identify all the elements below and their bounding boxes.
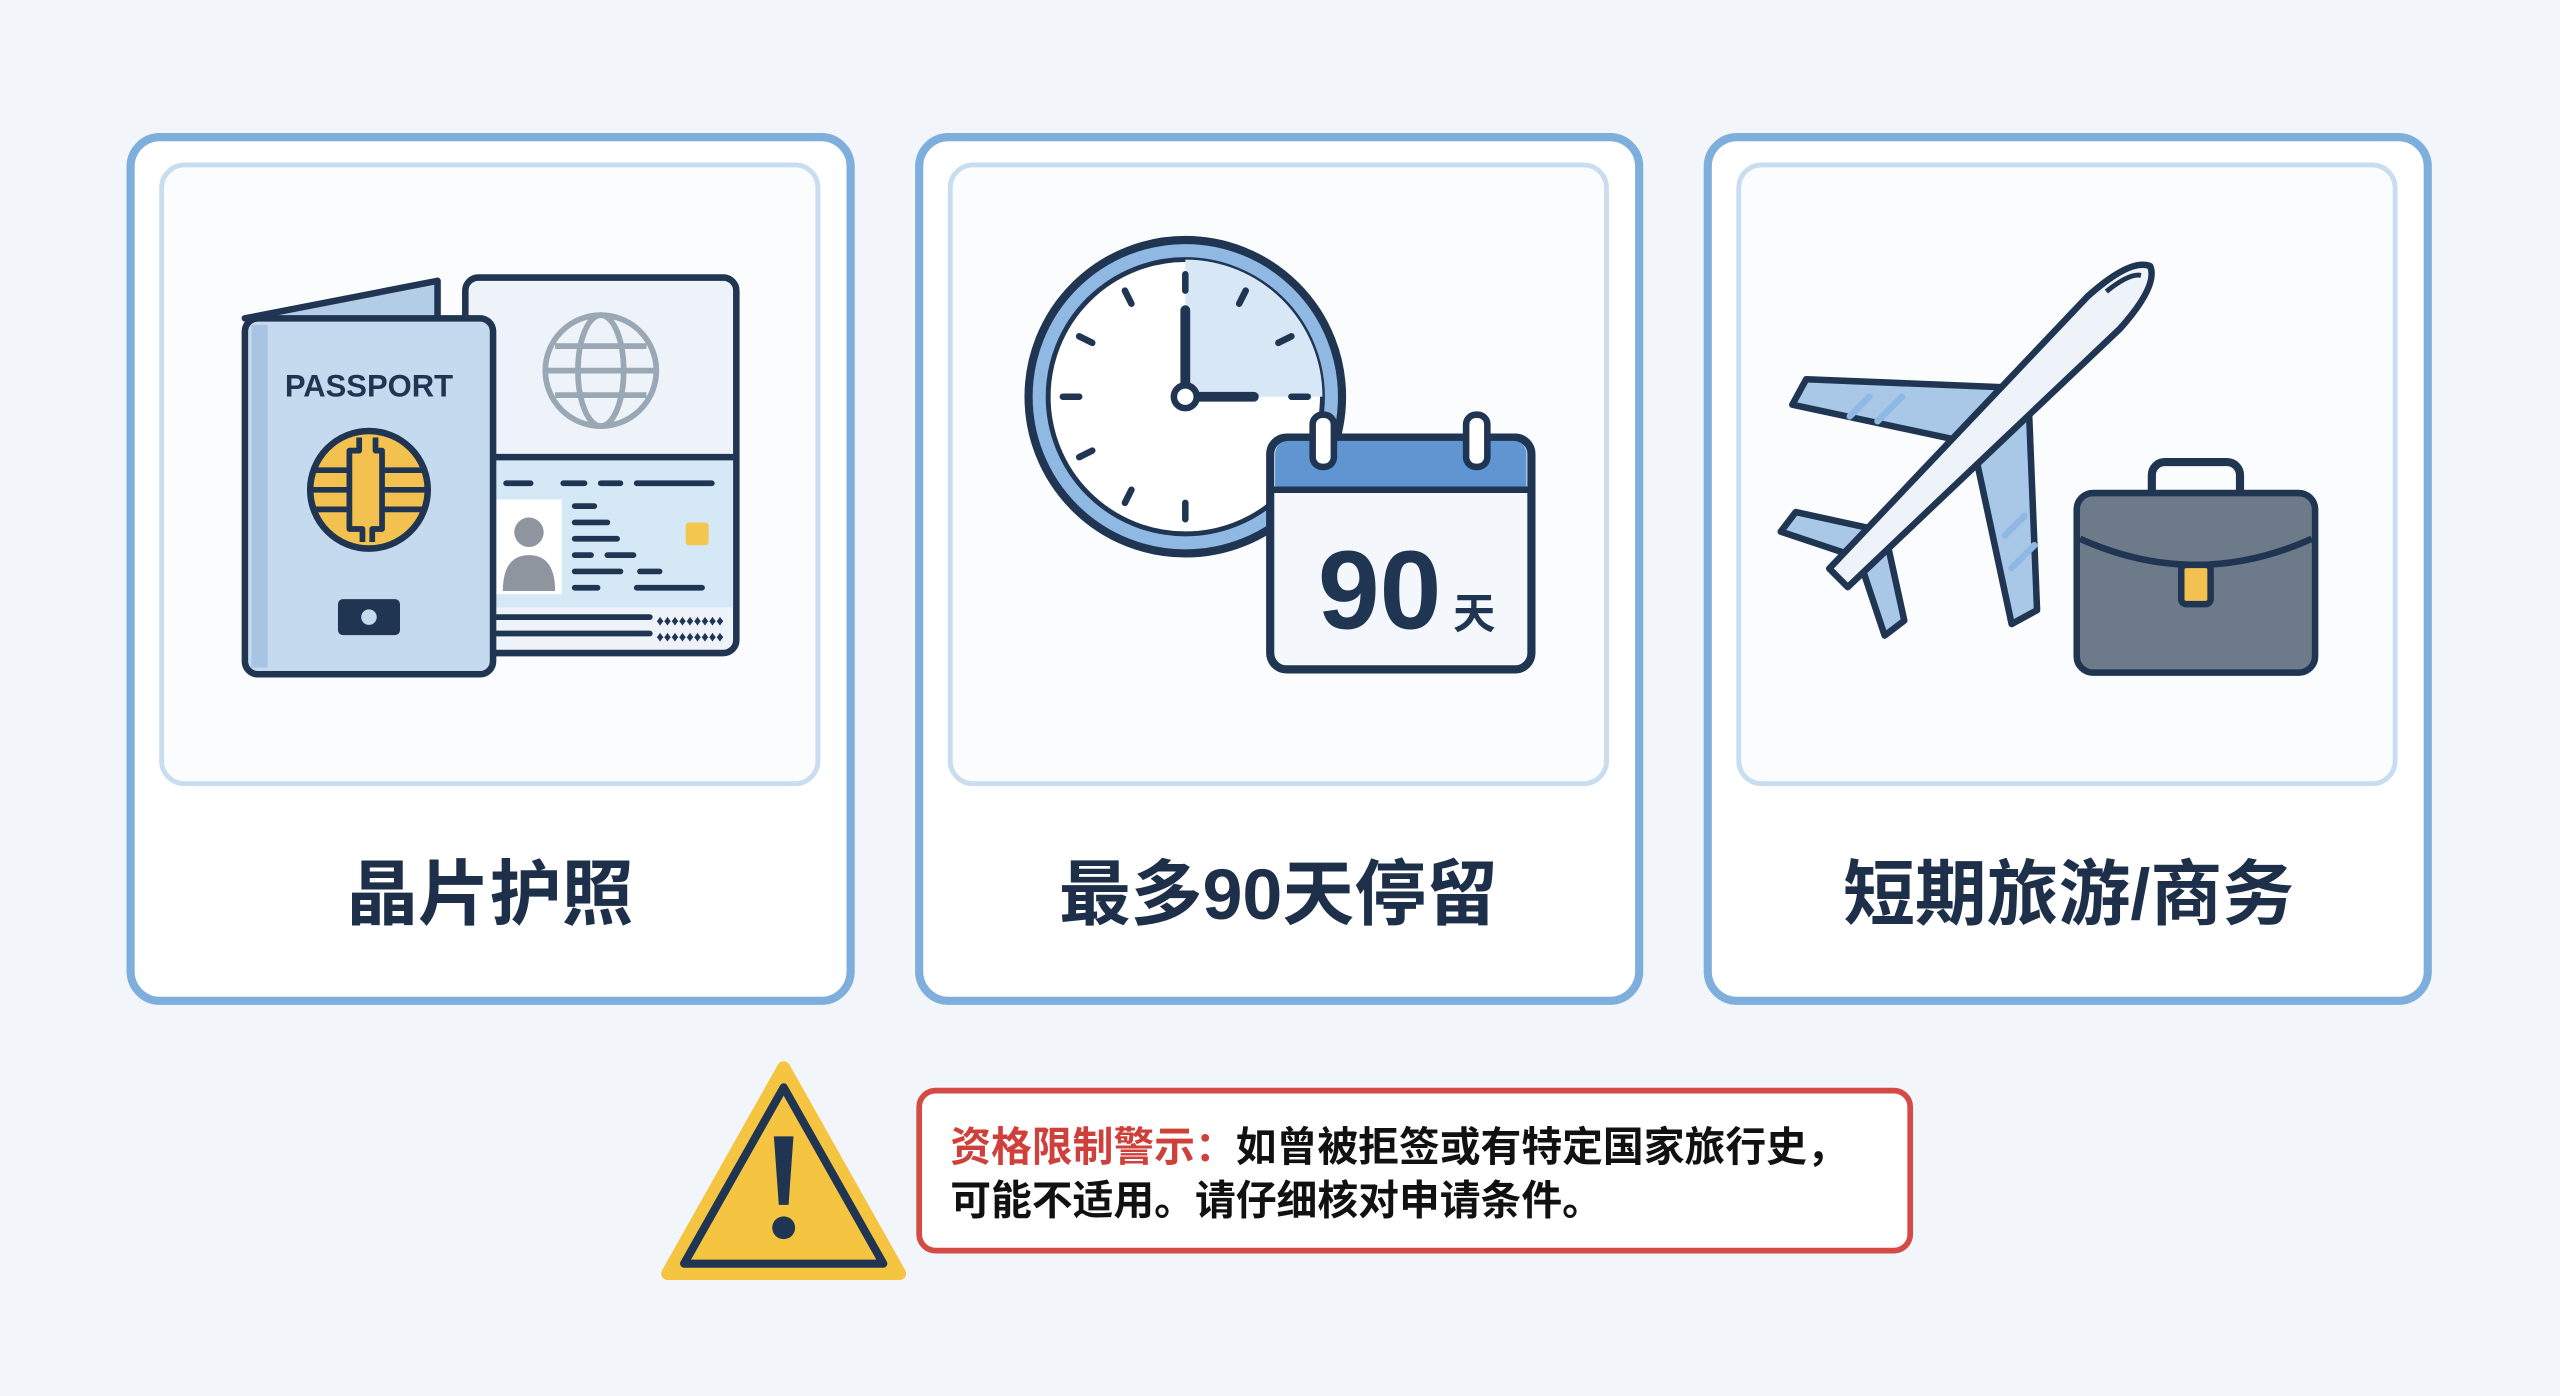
callout: eligibility warning: 可能不适用。请仔细核对申请条件。 [950,1178,1603,1224]
icon: airplane [1717,151,2266,699]
label: chip passport: 晶片护照 [346,855,633,935]
panel: passport [131,137,851,1001]
icon: briefcase [2077,462,2315,673]
label: max 90 days stay: 最多90天停留 [1059,855,1498,935]
callout: eligibility warning [919,1091,1910,1251]
icon: calendar 90 days: 天 [1453,591,1496,638]
icon: clock [1029,240,1342,553]
icon: passport: ♦♦♦♦♦♦♦♦♦ [656,613,724,629]
icon: warning triangle [668,1068,900,1273]
icon: passport: PASSPORT [285,369,453,404]
label: short tourism / business: 短期旅游/商务 [1843,855,2294,935]
icon: calendar 90 days [1270,415,1531,669]
panel: 90 days [919,137,1639,1001]
panel: short trip [1708,137,2428,1001]
icon: speed lines [1850,397,2034,568]
callout: eligibility warning: 资格限制警示：如曾被拒签或有特定国家旅行史， [950,1124,1848,1170]
icon: calendar 90 days: 90 [1318,528,1441,653]
icon: passport [245,278,736,674]
icon: passport: ♦♦♦♦♦♦♦♦♦ [656,630,724,646]
